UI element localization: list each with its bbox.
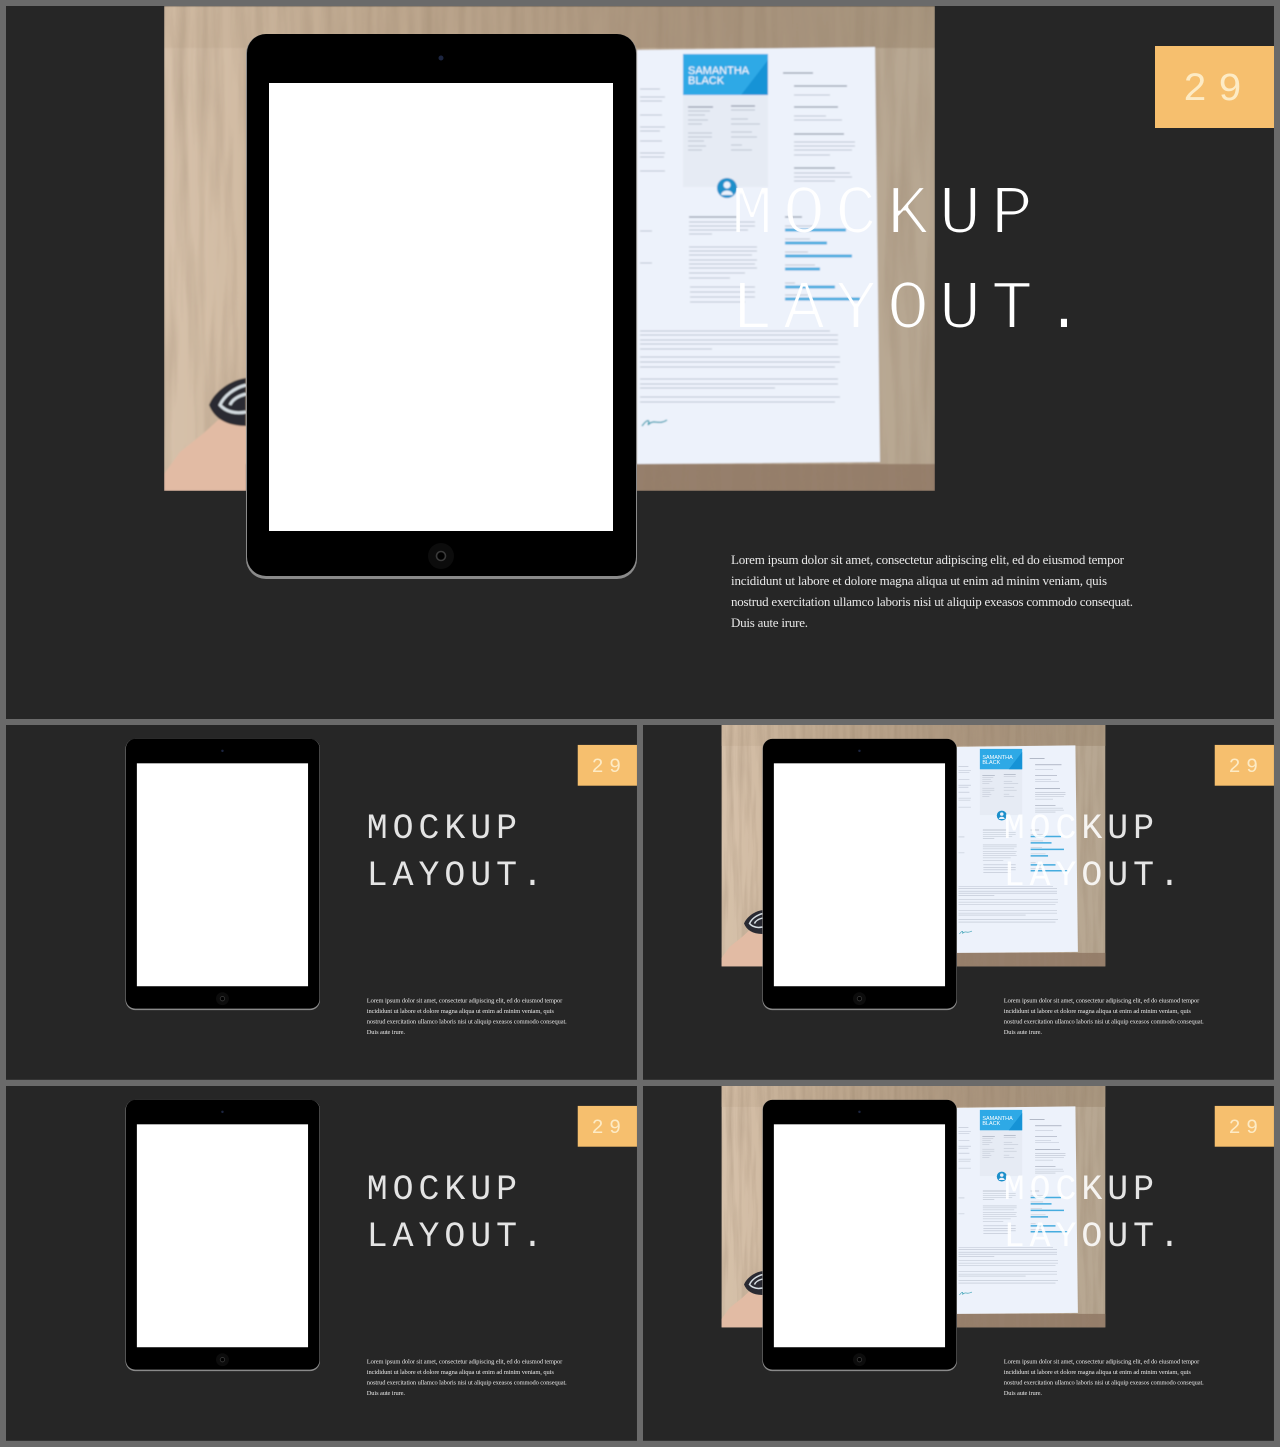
photo: wooden desk with resume xyxy=(164,6,935,491)
page number badge: 29 xyxy=(1229,755,1264,778)
photo: wooden desk with resume xyxy=(722,725,1105,966)
body text: Lorem ipsum dolor sit amet, consectetur adipiscing elit, ed do eiusmod tempor xyxy=(367,998,563,1005)
body text: Duis aute irure. xyxy=(1004,1390,1042,1397)
panel: small slide, with photo, upper right xyxy=(643,725,1274,1080)
body text: Lorem ipsum dolor sit amet, consectetur adipiscing elit, ed do eiusmod tempor xyxy=(731,552,1125,567)
body text: Lorem ipsum dolor sit amet, consectetur adipiscing elit, ed do eiusmod tempor xyxy=(1004,998,1200,1005)
panel: main slide xyxy=(6,6,1274,719)
body text: nostrud exercitation ullamco laboris nisi ut aliquip exeasos commodo consequat. xyxy=(1004,1380,1204,1387)
panel: small slide, tablet only, upper left xyxy=(6,725,637,1080)
page number badge xyxy=(1155,46,1274,128)
icon: tablet mockup xyxy=(762,739,957,1010)
body text xyxy=(1004,998,1204,1036)
page number badge xyxy=(578,745,637,786)
title: LAYOUT. xyxy=(367,1218,548,1257)
page number badge xyxy=(1215,745,1274,786)
page number badge xyxy=(578,1106,637,1147)
title xyxy=(1004,1171,1185,1257)
title: MOCKUP xyxy=(731,176,1043,255)
body text: incididunt ut labore et dolore magna aliqua ut enim ad minim veniam, quis xyxy=(367,1008,554,1015)
title: LAYOUT. xyxy=(1004,857,1185,896)
body text: incididunt ut labore et dolore magna aliqua ut enim ad minim veniam, quis xyxy=(1004,1369,1191,1376)
title: MOCKUP xyxy=(367,810,522,849)
body text xyxy=(367,998,567,1036)
title: LAYOUT. xyxy=(1004,1218,1185,1257)
body text: nostrud exercitation ullamco laboris nisi ut aliquip exeasos commodo consequat. xyxy=(367,1019,567,1026)
body text: nostrud exercitation ullamco laboris nisi ut aliquip exeasos commodo consequat. xyxy=(367,1380,567,1387)
icon: tablet mockup xyxy=(246,34,637,579)
body text xyxy=(1004,1359,1204,1397)
body text: Duis aute irure. xyxy=(1004,1029,1042,1036)
icon: tablet mockup xyxy=(762,1100,957,1371)
title: MOCKUP xyxy=(1004,810,1159,849)
page number badge: 29 xyxy=(1229,1116,1264,1139)
body text: Duis aute irure. xyxy=(731,615,808,630)
title: MOCKUP xyxy=(1004,1171,1159,1210)
title xyxy=(367,810,548,896)
page number badge: 29 xyxy=(592,1116,627,1139)
title xyxy=(1004,810,1185,896)
body text xyxy=(731,552,1133,630)
title xyxy=(367,1171,548,1257)
body text: incididunt ut labore et dolore magna aliqua ut enim ad minim veniam, quis xyxy=(731,573,1107,588)
body text: Duis aute irure. xyxy=(367,1029,405,1036)
title: LAYOUT. xyxy=(367,857,548,896)
body text: Lorem ipsum dolor sit amet, consectetur adipiscing elit, ed do eiusmod tempor xyxy=(1004,1359,1200,1366)
body text xyxy=(367,1359,567,1397)
panel: small slide, tablet only, lower left xyxy=(6,1086,637,1441)
body text: Duis aute irure. xyxy=(367,1390,405,1397)
icon: tablet mockup xyxy=(125,739,320,1010)
icon: tablet mockup xyxy=(125,1100,320,1371)
title: LAYOUT. xyxy=(731,271,1095,350)
body text: nostrud exercitation ullamco laboris nisi ut aliquip exeasos commodo consequat. xyxy=(1004,1019,1204,1026)
body text: nostrud exercitation ullamco laboris nisi ut aliquip exeasos commodo consequat. xyxy=(731,594,1133,609)
page number badge: 29 xyxy=(592,755,627,778)
body text: Lorem ipsum dolor sit amet, consectetur adipiscing elit, ed do eiusmod tempor xyxy=(367,1359,563,1366)
title xyxy=(731,176,1095,350)
page number badge: 29 xyxy=(1183,68,1253,113)
body text: incididunt ut labore et dolore magna aliqua ut enim ad minim veniam, quis xyxy=(1004,1008,1191,1015)
body text: incididunt ut labore et dolore magna aliqua ut enim ad minim veniam, quis xyxy=(367,1369,554,1376)
panel: small slide, with photo, lower right xyxy=(643,1086,1274,1441)
title: MOCKUP xyxy=(367,1171,522,1210)
page number badge xyxy=(1215,1106,1274,1147)
photo: wooden desk with resume xyxy=(722,1086,1105,1327)
